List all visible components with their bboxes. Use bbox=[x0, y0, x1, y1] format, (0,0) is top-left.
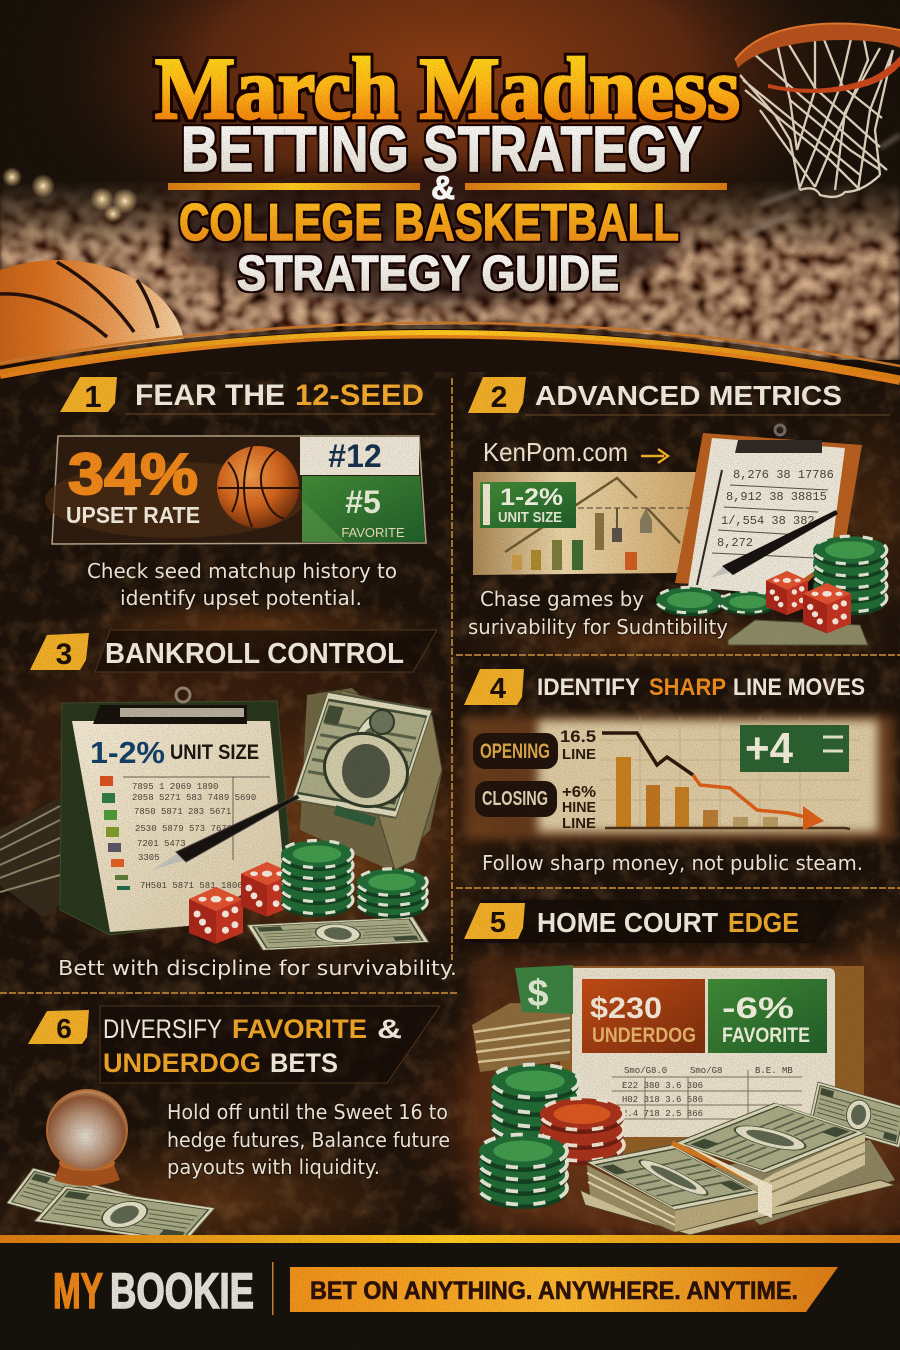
axis bbox=[605, 828, 850, 829]
odds table: H02 318 3.6 586 bbox=[622, 1095, 703, 1105]
unit size tag: 1-2% bbox=[500, 484, 563, 511]
number badge 1: 1 bbox=[84, 379, 102, 414]
logo bbox=[53, 1263, 254, 1319]
icon: crystal ball bbox=[47, 1090, 127, 1186]
odds table: Smo/G8 bbox=[690, 1066, 722, 1076]
number badge 2 bbox=[468, 377, 526, 414]
flat chips bbox=[656, 587, 776, 616]
title divider with ampersand: & bbox=[431, 169, 455, 206]
number badge 2: 2 bbox=[491, 381, 507, 414]
+4 box bbox=[740, 724, 849, 773]
cash under crystal ball bbox=[7, 1168, 215, 1243]
pen bbox=[710, 510, 838, 578]
color key bbox=[100, 776, 130, 890]
opening value bbox=[560, 727, 596, 763]
heading: FEAR THE bbox=[135, 379, 285, 412]
closing pill bbox=[475, 781, 557, 817]
panel: bankroll control bbox=[0, 630, 457, 980]
body text: identify upset potential. bbox=[120, 586, 362, 610]
small cash under chips bbox=[247, 917, 429, 950]
opening pill bbox=[473, 733, 558, 769]
cash under dice bbox=[728, 620, 868, 645]
number badge 4 bbox=[464, 669, 524, 705]
heading bbox=[125, 379, 435, 414]
clipboard rows: 8,272 bbox=[717, 536, 753, 550]
green cash with dollar sign: $ bbox=[527, 973, 549, 1015]
opening value: 16.5 bbox=[560, 727, 596, 746]
unit size label bbox=[90, 735, 259, 770]
table: 7H501 5871 581 1806 bbox=[140, 881, 243, 891]
closing value bbox=[562, 784, 596, 832]
clipboard rows bbox=[712, 468, 834, 558]
money stack left bbox=[0, 797, 60, 917]
title line: Strategy Guide: STRATEGY GUIDE bbox=[237, 247, 619, 301]
body text: Chase games by bbox=[480, 587, 644, 611]
basketball hoop and net bbox=[735, 24, 900, 235]
big cash fan bbox=[292, 688, 442, 870]
table bbox=[123, 777, 270, 891]
body text: Follow sharp money, not public steam. bbox=[482, 851, 863, 875]
bars bbox=[616, 757, 778, 828]
number badge 4: 4 bbox=[490, 673, 506, 705]
opening value: LINE bbox=[562, 746, 596, 763]
footer bbox=[0, 1235, 900, 1350]
unit size tag: UNIT SIZE bbox=[498, 509, 562, 526]
trend line bbox=[602, 733, 824, 830]
number badge 5 bbox=[464, 903, 525, 939]
dice bbox=[189, 862, 293, 944]
seed 5 panel bbox=[302, 476, 425, 542]
odds table: 2.4 718 2.5 866 bbox=[622, 1109, 703, 1119]
favorite panel bbox=[708, 979, 827, 1053]
tan board bbox=[560, 966, 864, 1156]
title bbox=[155, 41, 740, 301]
logo: BOOKIE bbox=[110, 1263, 254, 1319]
clipboard bbox=[675, 425, 862, 595]
heading: SHARP bbox=[649, 674, 726, 701]
seed 12 panel: #12 bbox=[328, 438, 382, 474]
dice bbox=[766, 571, 851, 633]
basketball at lower left of header bbox=[0, 260, 184, 366]
chips stack bbox=[813, 536, 887, 615]
panel: home court edge bbox=[464, 900, 900, 1235]
title divider with ampersand bbox=[168, 169, 727, 206]
kenpom label: KenPom.com bbox=[483, 437, 628, 467]
opening pill: OPENING bbox=[480, 740, 550, 763]
heading: ADVANCED METRICS bbox=[535, 380, 842, 411]
stat box bbox=[45, 436, 426, 544]
table: 2530 5879 573 7679 bbox=[135, 824, 232, 834]
unit size label: 1-2% bbox=[90, 735, 165, 770]
poker chips bbox=[479, 1064, 624, 1209]
number badge 6 bbox=[28, 1010, 89, 1044]
logo: MY bbox=[53, 1263, 103, 1319]
table: 7850 5871 283 5671 bbox=[134, 807, 231, 817]
clipboard rows: 8,912 38 38815 bbox=[726, 490, 827, 504]
heading: & bbox=[377, 1014, 402, 1044]
tagline banner: BET ON ANYTHING. ANYWHERE. ANYTIME. bbox=[310, 1277, 798, 1305]
number badge 3: 3 bbox=[56, 638, 72, 671]
seed 5 panel: #5 bbox=[345, 484, 381, 520]
table: 7895 1 2069 1890 bbox=[132, 782, 218, 792]
cash bundle bbox=[580, 1082, 900, 1235]
heading: 12-SEED bbox=[295, 379, 424, 412]
underdog panel: $230 bbox=[590, 992, 662, 1025]
wood scene background bbox=[470, 955, 900, 1230]
closing pill: CLOSING bbox=[482, 788, 548, 810]
heading: BETS bbox=[270, 1048, 338, 1078]
odds table bbox=[612, 1066, 802, 1119]
clipboard rows: 1/,554 38 382 bbox=[721, 514, 815, 528]
body text: surivability for Sudntibility bbox=[468, 615, 728, 639]
tagline banner bbox=[290, 1267, 838, 1312]
title line: College Basketball: COLLEGE BASKETBALL bbox=[179, 194, 679, 252]
logo divider bbox=[272, 1262, 274, 1315]
favorite panel: FAVORITE bbox=[722, 1024, 810, 1047]
green cash with dollar sign bbox=[515, 965, 573, 1015]
arena arc divider and body base bbox=[0, 323, 900, 1280]
heading: UNDERDOG bbox=[103, 1048, 261, 1078]
title line: March Madness: March Madness bbox=[155, 41, 740, 138]
odds card bbox=[572, 968, 835, 1137]
table: 2058 5271 583 7489 5690 bbox=[132, 793, 256, 803]
body text bbox=[167, 1100, 450, 1179]
body text: Check seed matchup history to bbox=[87, 559, 397, 583]
body text bbox=[87, 559, 397, 610]
underdog panel bbox=[582, 979, 705, 1053]
background bbox=[0, 0, 900, 360]
upset rate label: UPSET RATE bbox=[66, 502, 200, 528]
panel: identify sharp line moves bbox=[464, 669, 895, 875]
body text: payouts with liquidity. bbox=[167, 1155, 380, 1179]
seed 5 panel: FAVORITE bbox=[341, 525, 405, 540]
clipboard rows: 8,276 38 17786 bbox=[733, 468, 834, 482]
number badge 6: 6 bbox=[56, 1013, 72, 1044]
number badge 5: 5 bbox=[490, 907, 506, 939]
metrics chart bbox=[473, 472, 696, 575]
closing value: HINE bbox=[562, 799, 596, 816]
poker chips bbox=[281, 840, 427, 919]
title line: Betting Strategy: BETTING STRATEGY bbox=[181, 113, 702, 185]
closing value: LINE bbox=[562, 815, 596, 832]
clip bbox=[93, 688, 247, 724]
line move chart bbox=[465, 716, 895, 840]
odds table: E22 380 3.6 306 bbox=[622, 1081, 703, 1091]
body text: Hold off until the Sweet 16 to bbox=[167, 1100, 448, 1124]
notes stack bbox=[472, 1003, 570, 1072]
icon: basketball bbox=[217, 446, 299, 528]
heading plate bbox=[100, 1006, 440, 1083]
panel: diversify favorite and underdog bets bbox=[7, 1006, 450, 1243]
heading bbox=[537, 674, 865, 701]
number badge 3 bbox=[30, 633, 89, 671]
panel: fear the 12-seed bbox=[45, 377, 435, 610]
section dividers bbox=[0, 378, 900, 993]
pen bbox=[152, 795, 299, 870]
heading: DIVERSIFY bbox=[103, 1014, 222, 1044]
heading: IDENTIFY bbox=[537, 674, 640, 701]
heading bbox=[103, 1014, 402, 1078]
unit size label: UNIT SIZE bbox=[170, 741, 259, 764]
heading plate bbox=[470, 900, 845, 943]
odds table: B.E. MB bbox=[755, 1066, 793, 1076]
table: 3305 bbox=[138, 853, 160, 863]
seed 12 panel bbox=[300, 437, 419, 475]
odds table: Smo/G8.0 bbox=[624, 1066, 667, 1076]
heading: LINE MOVES bbox=[733, 674, 865, 701]
closing value: +6% bbox=[562, 784, 596, 801]
+4 box: +4 bbox=[745, 724, 794, 773]
unit size tag bbox=[480, 482, 576, 528]
panel: advanced metrics bbox=[468, 377, 890, 645]
heading plate bbox=[95, 630, 437, 672]
body text bbox=[468, 587, 728, 639]
34 percent stat: 34% bbox=[68, 442, 198, 507]
table: 7201 5473 bbox=[137, 839, 186, 849]
underdog panel: UNDERDOG bbox=[592, 1024, 696, 1047]
body text: hedge futures, Balance future bbox=[167, 1128, 450, 1152]
heading: EDGE bbox=[728, 907, 799, 938]
favorite panel: -6% bbox=[722, 992, 794, 1025]
body text: Bett with discipline for survivability. bbox=[58, 956, 457, 980]
heading: FAVORITE bbox=[232, 1014, 367, 1044]
gold bar bbox=[0, 1235, 900, 1243]
clipboard with unit-size table bbox=[60, 688, 299, 935]
heading: BANKROLL CONTROL bbox=[105, 638, 404, 670]
number badge 1 bbox=[60, 377, 117, 414]
heading: HOME COURT bbox=[537, 907, 718, 938]
